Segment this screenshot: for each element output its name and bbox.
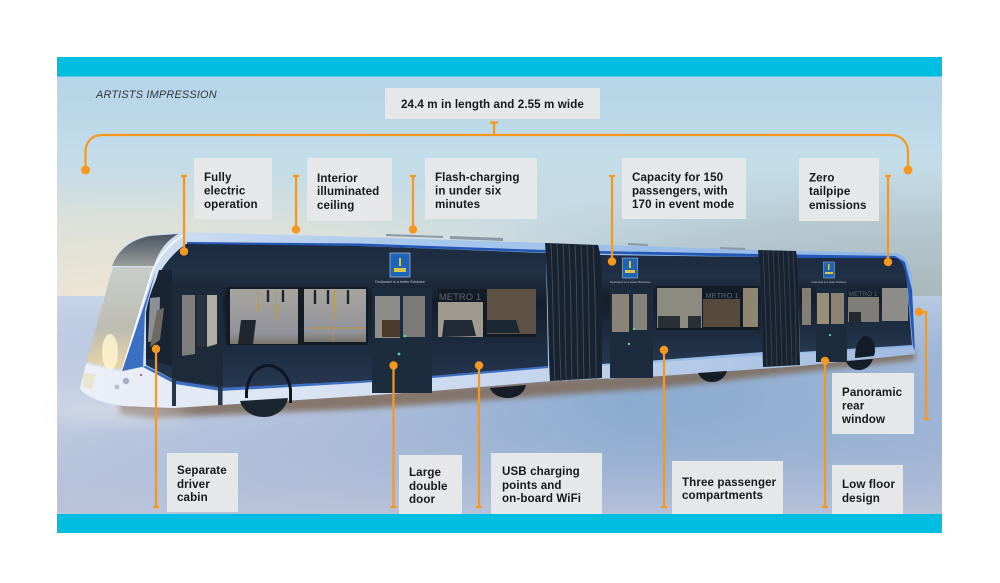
logo one [375, 253, 425, 284]
ground shadow [50, 350, 915, 421]
label: flash charging: Flash-charging [435, 171, 520, 184]
label: large double door: door [409, 493, 436, 506]
body segment three [797, 258, 912, 352]
label: separate driver cabin: driver [177, 478, 210, 491]
second segment door and windows [610, 286, 759, 378]
double door [372, 288, 432, 393]
label: low floor design: Low floor [842, 478, 895, 491]
bus silhouette [80, 232, 915, 408]
cab door [172, 288, 223, 406]
second segment door and windows: METRO 1 [705, 291, 739, 300]
label: large double door: double [409, 480, 448, 493]
label: fully electric operation: Fully [204, 171, 232, 184]
label: zero tailpipe emissions: Zero [809, 172, 835, 184]
label: large double door: Large [409, 466, 442, 479]
label: zero tailpipe emissions [799, 158, 892, 266]
label: three passenger compartments: Three passenger [682, 476, 777, 489]
label: interior illuminated ceiling: Interior [317, 172, 358, 185]
third segment door and windows: METRO 1 [849, 291, 878, 298]
middle wheels [490, 371, 727, 398]
label: usb charging and wifi: on-board WiFi [502, 492, 581, 505]
label: three passenger compartments: compartments [682, 489, 763, 502]
label: panoramic rear window: window [841, 413, 886, 426]
driver window [146, 270, 172, 366]
label: fully electric operation: operation [204, 198, 258, 211]
roof dome glazing [112, 234, 178, 266]
a-pillar highlight [122, 235, 183, 371]
artists impression note: ARTISTS IMPRESSION [95, 89, 217, 101]
label: low floor design [821, 357, 903, 514]
windows centre of first segment: METRO 1 [439, 292, 481, 303]
bellows one [545, 243, 602, 381]
logo three [811, 262, 847, 284]
front wheel [240, 364, 292, 417]
articulated bus [80, 232, 915, 417]
top cyan bar [57, 57, 942, 76]
blue wedge [122, 270, 548, 391]
label: capacity: Capacity for 150 [632, 171, 723, 184]
label: interior illuminated ceiling: illuminated [317, 185, 379, 198]
label: fully electric operation [180, 158, 272, 256]
third segment door and windows [802, 288, 908, 362]
roof solar panels [386, 234, 745, 250]
label: usb charging and wifi: points and [502, 479, 562, 492]
logo three: Dedicated to a better Brisbane [811, 280, 847, 284]
label: separate driver cabin: Separate [177, 464, 227, 477]
label: panoramic rear window: rear [842, 400, 865, 412]
label: panoramic rear window: Panoramic [842, 386, 903, 399]
label: large double door [389, 361, 462, 514]
logo two [610, 258, 651, 284]
bellows two [758, 250, 800, 367]
windshield [88, 267, 154, 370]
front skirt [80, 347, 915, 408]
logo two: Dedicated to a better Brisbane [610, 280, 651, 284]
label: fully electric operation: electric [204, 184, 246, 198]
body segment two [600, 255, 763, 364]
roof stripe [187, 242, 915, 351]
label: three passenger compartments [660, 346, 783, 514]
bottom cyan bar [57, 514, 942, 533]
label: zero tailpipe emissions: tailpipe [809, 185, 851, 198]
label: separate driver cabin [152, 345, 238, 512]
label: interior illuminated ceiling: ceiling [317, 199, 354, 212]
background scene [57, 76, 942, 514]
logo one: Dedicated to a better Brisbane [375, 280, 425, 284]
label: panoramic rear window [832, 308, 929, 434]
label: separate driver cabin: cabin [177, 491, 208, 504]
body segment one [146, 244, 548, 388]
label: flash charging: in under six [435, 184, 502, 198]
label: low floor design: design [842, 492, 880, 505]
label: overall dimensions: 24.4 m in length and 2.55 m wide [401, 98, 584, 111]
label: capacity [608, 158, 746, 266]
label: capacity: 170 in event mode [632, 198, 735, 211]
headlights [83, 372, 142, 390]
label: usb charging and wifi [475, 361, 602, 514]
label: capacity: passengers, with [632, 184, 728, 198]
label: flash charging [409, 158, 537, 234]
label: interior illuminated ceiling [292, 158, 392, 234]
label: zero tailpipe emissions: emissions [809, 199, 867, 212]
label: overall dimensions [81, 88, 912, 174]
driver seat [150, 308, 164, 347]
label: flash charging: minutes [435, 198, 480, 211]
windows first segment [226, 287, 536, 345]
rear wheel [846, 336, 875, 370]
label: usb charging and wifi: USB charging [502, 465, 580, 478]
windows centre of first segment [438, 289, 536, 337]
